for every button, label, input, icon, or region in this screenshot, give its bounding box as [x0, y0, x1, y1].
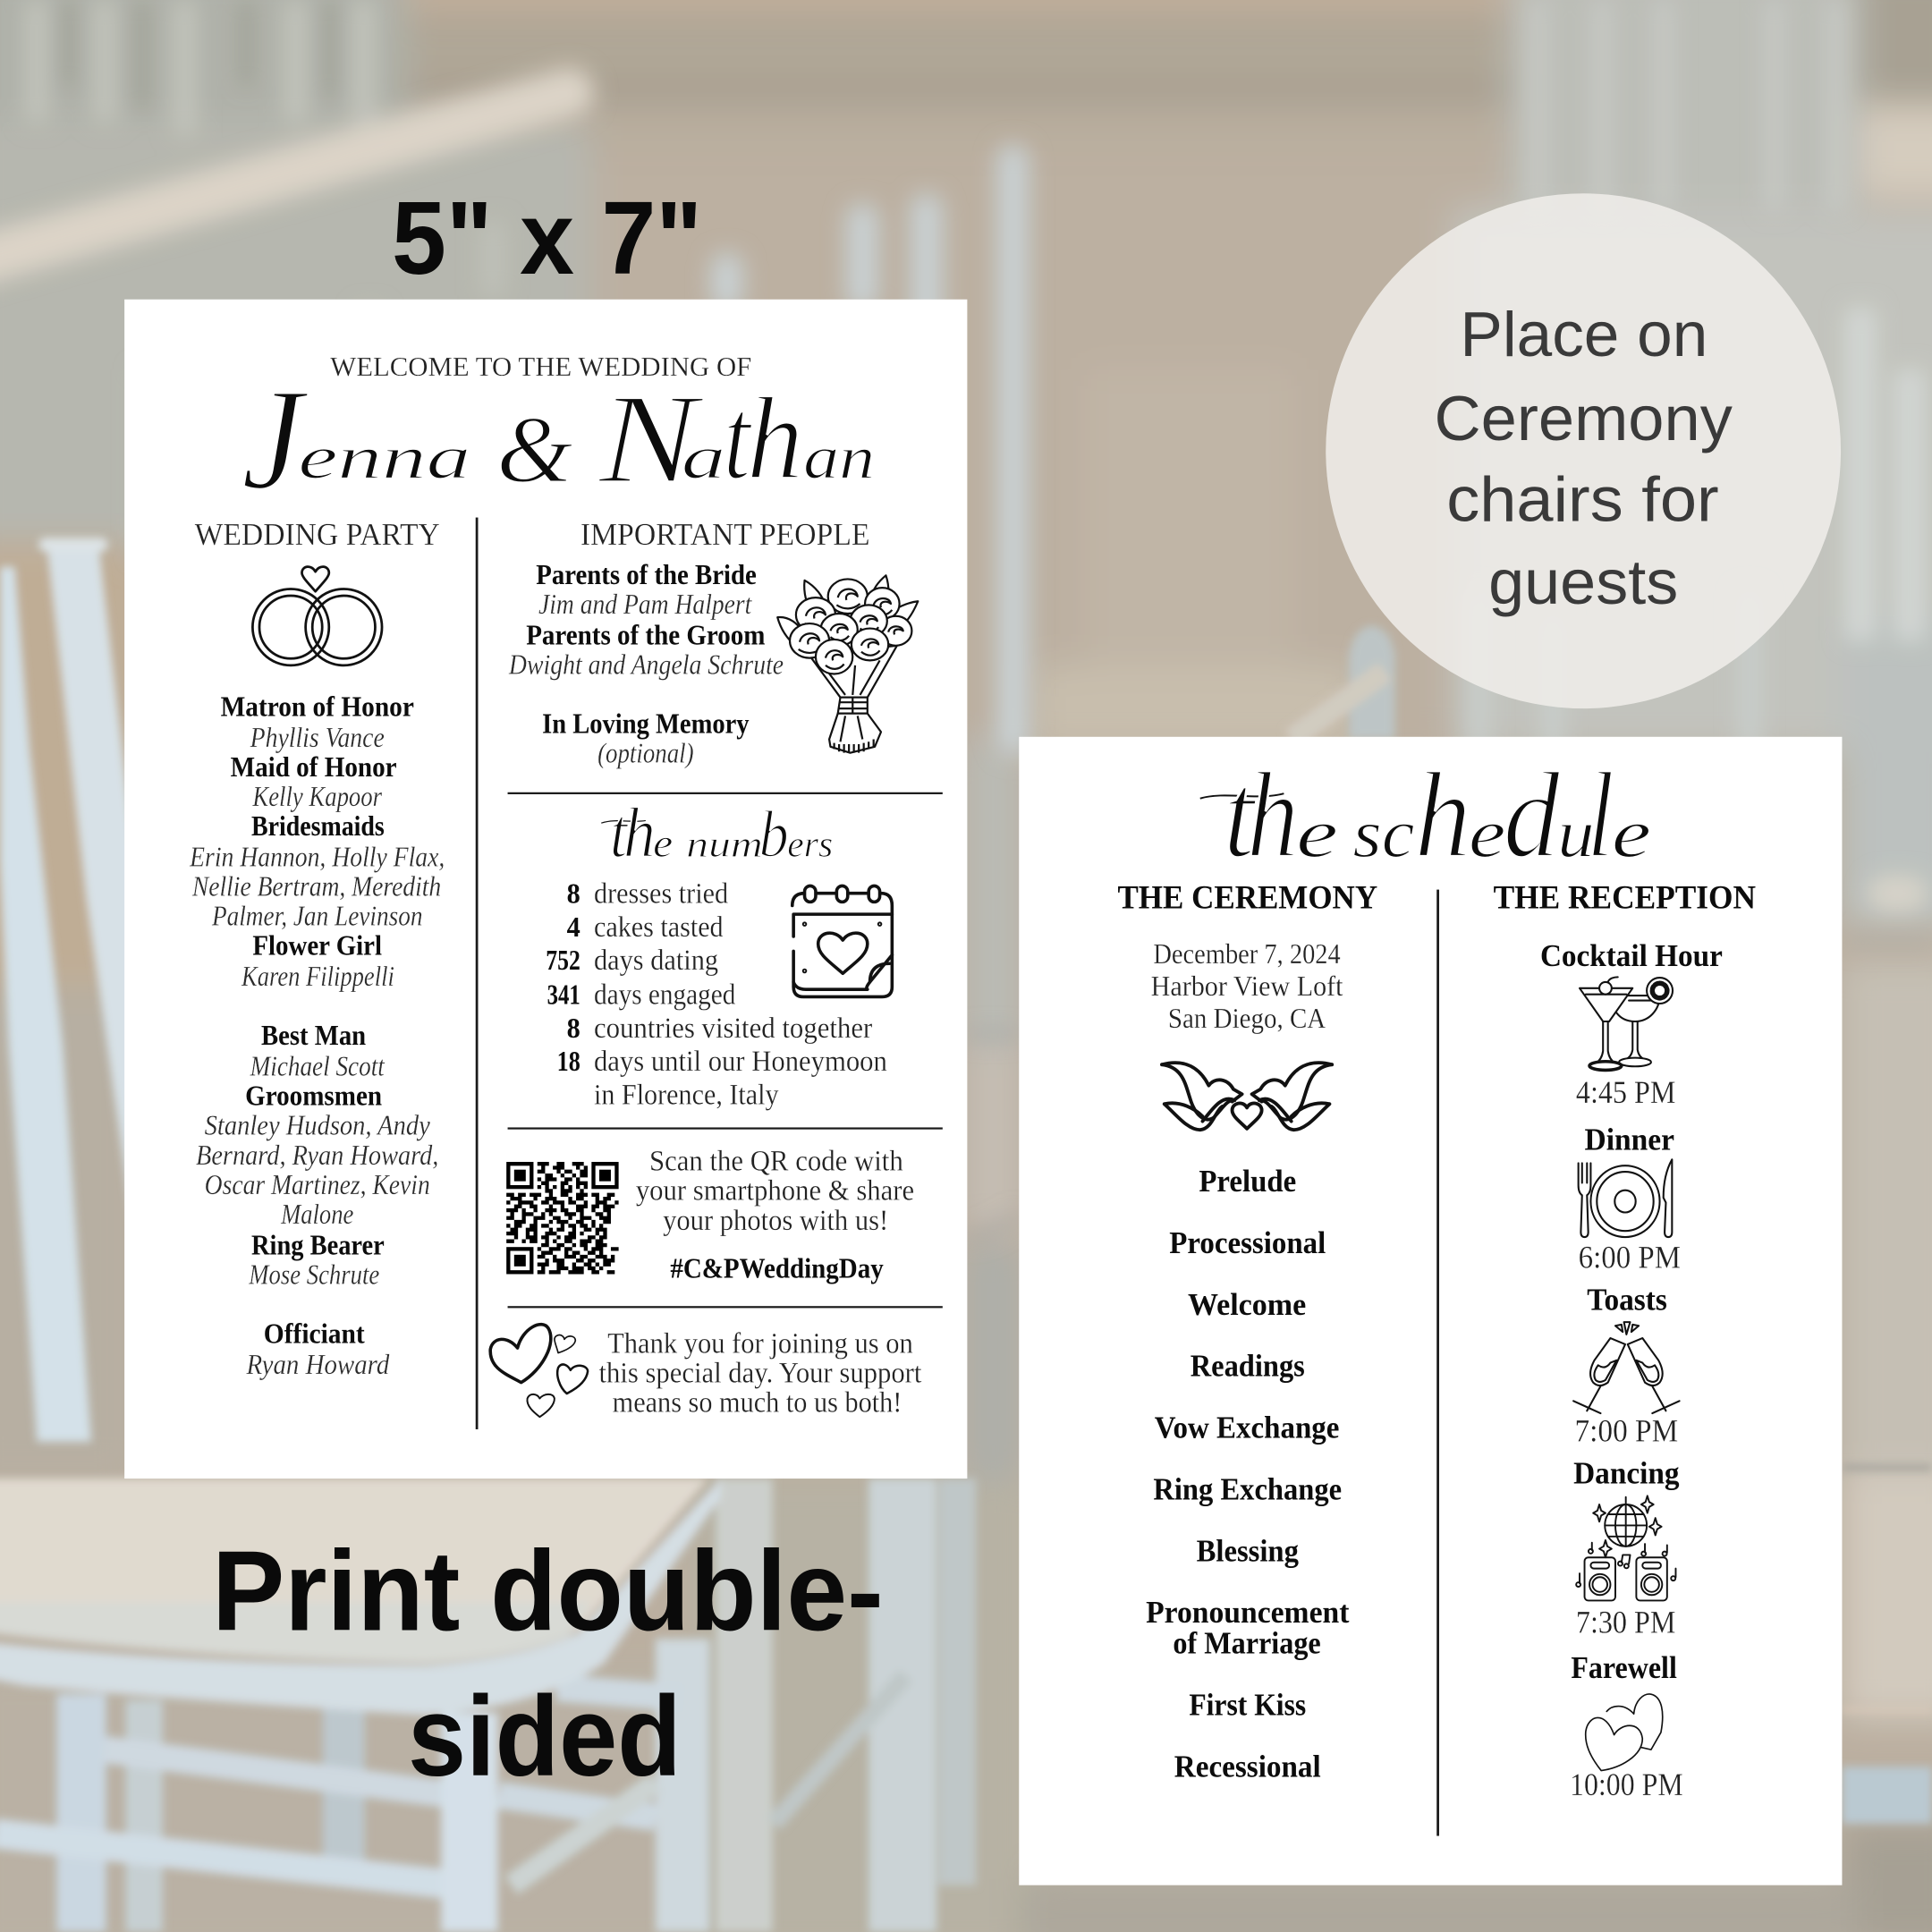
list: attendants: Palmer, Jan Levinson — [211, 901, 423, 932]
script title: the schedule: e — [1296, 794, 1338, 871]
text: date and venue — [1151, 938, 1343, 1034]
list: number facts: in Florence, Italy — [594, 1079, 779, 1111]
list: number facts: 4 — [567, 911, 580, 943]
script title: the schedule: e — [1612, 794, 1651, 871]
text: date and venue: December 7, 2024 — [1153, 938, 1341, 970]
list: attendants: Ring Bearer — [251, 1229, 385, 1260]
timeline: toasts — [1573, 1283, 1680, 1449]
timeline: dancing — [1573, 1457, 1680, 1640]
text: scan instructions: #C&PWeddingDay — [670, 1253, 884, 1284]
script heading: the numbers: b — [759, 798, 789, 871]
list: attendants: Groomsmen — [245, 1080, 382, 1112]
list: attendants: Matron of Honor — [221, 691, 414, 722]
script heading: the numbers — [601, 793, 833, 872]
section: the numbers — [546, 793, 892, 1111]
text: date and venue: Harbor View Loft — [1151, 970, 1343, 1002]
list: attendants: Malone — [280, 1199, 353, 1230]
icon: rose bouquet — [777, 575, 918, 753]
divider — [508, 1306, 943, 1308]
text: scan instructions: your smartphone & share — [636, 1175, 914, 1208]
text: parents and memory: (optional) — [597, 738, 694, 769]
divider — [508, 792, 943, 794]
list: attendants: Flower Girl — [252, 930, 382, 962]
list: ceremony order: Readings — [1191, 1350, 1305, 1384]
list: attendants: Bernard, Ryan Howard, — [196, 1140, 438, 1171]
divider: vertical column line — [476, 518, 478, 1429]
list: attendants: Ryan Howard — [246, 1349, 389, 1380]
list: number facts: dresses tried — [594, 878, 729, 911]
list: ceremony order: of Marriage — [1173, 1627, 1321, 1661]
list: ceremony order: Welcome — [1188, 1288, 1306, 1322]
timeline: dinner: Dinner — [1585, 1123, 1674, 1157]
heading: the reception: THE RECEPTION — [1494, 879, 1756, 916]
panel: program front card — [124, 300, 967, 1479]
timeline: toasts: Toasts — [1587, 1283, 1667, 1317]
script title: the schedule: u — [1557, 794, 1595, 871]
timeline: cocktail hour: 4:45 PM — [1576, 1074, 1675, 1110]
script title: the schedule: sc — [1353, 794, 1414, 871]
timeline: dinner — [1579, 1123, 1681, 1275]
list: attendants: Officiant — [264, 1318, 365, 1350]
welcome line: WELCOME TO THE WEDDING OF — [330, 352, 751, 382]
script title: couple names: enna — [298, 423, 470, 491]
column: the reception — [1494, 879, 1756, 1802]
text: scan instructions: your photos with us! — [663, 1205, 888, 1237]
timeline: toasts: 7:00 PM — [1575, 1413, 1678, 1449]
list: ceremony order: Ring Exchange — [1153, 1472, 1342, 1506]
text: thank you message: Thank you for joining us on — [607, 1328, 913, 1360]
list: number facts: 8 — [567, 878, 580, 910]
list: attendants: Michael Scott — [250, 1051, 386, 1082]
script title: the schedule: e — [1469, 794, 1505, 871]
list: attendants: Kelly Kapoor — [252, 781, 383, 812]
list: attendants: Maid of Honor — [231, 751, 397, 783]
script title: couple names: a — [682, 423, 725, 491]
list: ceremony order — [1146, 1165, 1350, 1784]
list: ceremony order: Vow Exchange — [1155, 1411, 1339, 1445]
list: number facts: 18 — [557, 1046, 580, 1077]
heading: card size: 5" x 7" — [392, 180, 702, 296]
text: parents and memory: Jim and Pam Halpert — [538, 589, 752, 620]
script title: the schedule: h — [1414, 746, 1471, 883]
panel: schedule card — [1019, 737, 1842, 1885]
list: number facts: 8 — [567, 1013, 580, 1044]
chair seat and frame, lower left — [887, 1479, 918, 1932]
timeline: cocktail hour: Cocktail Hour — [1540, 939, 1723, 973]
script title: couple names: t — [724, 372, 753, 504]
timeline: dancing: Dancing — [1573, 1457, 1680, 1491]
text: thank you message: means so much to us both! — [613, 1387, 902, 1419]
list: attendants: Mose Schrute — [248, 1258, 379, 1290]
list: attendants: Oscar Martinez, Kevin — [205, 1169, 430, 1200]
callout circle: place on ceremony chairs: guests — [1488, 547, 1678, 617]
text: parents and memory — [508, 559, 784, 769]
column: the ceremony — [1117, 879, 1377, 1784]
timeline: farewell: Farewell — [1571, 1651, 1677, 1685]
divider — [508, 1127, 943, 1130]
list: attendants: Erin Hannon, Holly Flax, — [189, 841, 445, 872]
script heading: the numbers: h — [623, 793, 656, 872]
script title: couple names: an — [803, 423, 875, 491]
section: QR photo sharing — [506, 1146, 914, 1284]
heading: print double-sided: Print double- — [212, 1528, 884, 1655]
text: parents and memory: In Loving Memory — [542, 708, 750, 740]
text: parents and memory: Dwight and Angela Schrute — [508, 649, 784, 681]
text: parents and memory: Parents of the Bride — [536, 559, 757, 590]
script title: the schedule — [1200, 746, 1651, 883]
script title: couple names: h — [747, 372, 803, 504]
list: ceremony order: First Kiss — [1189, 1689, 1306, 1723]
list: ceremony order: Recessional — [1174, 1750, 1321, 1784]
timeline: farewell — [1570, 1651, 1683, 1802]
list: attendants: Best Man — [261, 1020, 366, 1051]
text: scan instructions — [636, 1146, 914, 1284]
script title: the schedule: t — [1224, 746, 1258, 883]
list: number facts: countries visited together — [594, 1013, 872, 1045]
text: scan instructions: Scan the QR code with — [649, 1146, 903, 1178]
list: attendants: Karen Filippelli — [241, 961, 394, 992]
list: number facts — [546, 878, 887, 1111]
heading: important people: IMPORTANT PEOPLE — [580, 518, 870, 552]
text: date and venue: San Diego, CA — [1168, 1003, 1326, 1034]
list: attendants: Stanley Hudson, Andy — [205, 1110, 431, 1141]
timeline: farewell: 10:00 PM — [1570, 1767, 1683, 1802]
text: parents and memory: Parents of the Groom — [526, 619, 765, 650]
divider: vertical column line — [1436, 890, 1439, 1836]
list: ceremony order: Prelude — [1199, 1165, 1296, 1199]
heading: print double-sided: sided — [408, 1673, 682, 1800]
section: thank you — [490, 1325, 921, 1419]
list: attendants: Bridesmaids — [251, 810, 385, 842]
script title: couple names — [242, 360, 875, 521]
script title: the schedule: d — [1504, 746, 1561, 883]
callout circle: place on ceremony chairs — [1326, 193, 1841, 708]
list: number facts: days engaged — [594, 979, 736, 1012]
script title: couple names: N — [597, 368, 705, 510]
chair finial above schedule card — [1349, 626, 1394, 740]
list: attendants: Nellie Bertram, Meredith — [191, 870, 441, 902]
script heading: the numbers: num — [686, 823, 763, 864]
icon: calendar with heart — [792, 886, 892, 996]
icon: wedding rings with heart — [252, 567, 382, 665]
timeline: dancing: 7:30 PM — [1576, 1604, 1675, 1640]
script heading: the numbers: t — [610, 793, 629, 872]
list: number facts: days dating — [594, 945, 718, 977]
chair posts at left edge — [0, 567, 91, 1442]
text: thank you message — [598, 1328, 921, 1419]
script heading: the numbers: ers — [787, 823, 833, 864]
script title: couple names: & — [496, 397, 573, 504]
heading: the ceremony: THE CEREMONY — [1117, 879, 1377, 916]
callout circle: place on ceremony chairs: Ceremony — [1434, 383, 1733, 453]
script heading: the numbers: e — [653, 821, 673, 865]
list: attendants — [189, 691, 445, 1380]
icon: scattered hearts — [490, 1325, 588, 1417]
list: ceremony order: Blessing — [1197, 1534, 1299, 1568]
list: attendants: Phyllis Vance — [250, 722, 385, 753]
list: ceremony order: Pronouncement — [1146, 1596, 1350, 1630]
callout circle: place on ceremony chairs: chairs for — [1446, 464, 1719, 535]
far right chair seat edge — [1842, 1767, 1932, 1824]
list: number facts: cakes tasted — [594, 911, 724, 944]
list: number facts: 341 — [547, 979, 580, 1011]
timeline: cocktail hour — [1540, 939, 1723, 1110]
QR code — [506, 1164, 619, 1272]
list: ceremony order: Processional — [1169, 1226, 1326, 1260]
text: thank you message: this special day. Your support — [598, 1358, 921, 1390]
column: wedding party — [189, 518, 445, 1380]
script title: the schedule: h — [1247, 746, 1299, 883]
list: number facts: days until our Honeymoon — [594, 1046, 887, 1078]
icon: two doves with heart — [1162, 1063, 1332, 1130]
timeline: dinner: 6:00 PM — [1579, 1240, 1681, 1275]
callout circle: place on ceremony chairs: Place on — [1460, 299, 1707, 369]
heading: print double-sided — [212, 1528, 884, 1800]
script title: the schedule: l — [1587, 746, 1614, 883]
heading: wedding party: WEDDING PARTY — [195, 518, 440, 552]
section: important people — [508, 518, 918, 769]
script title: couple names: J — [242, 360, 309, 521]
list: number facts: 752 — [546, 945, 580, 976]
